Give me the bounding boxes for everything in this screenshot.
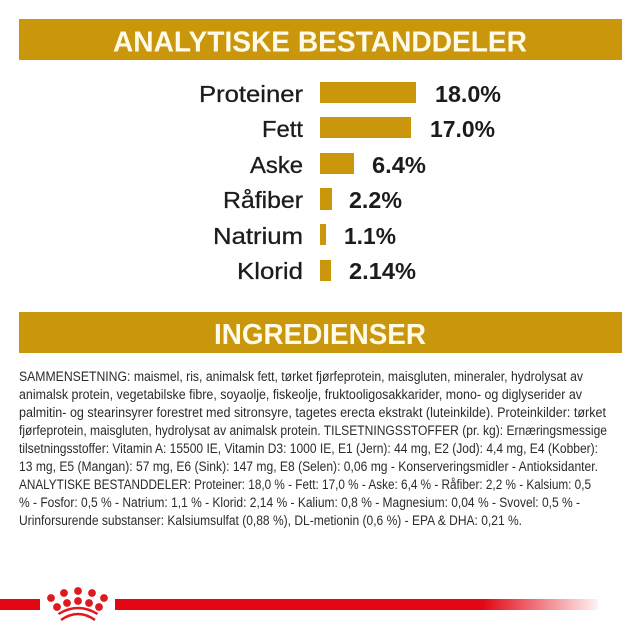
text block: ingredients: [19, 369, 607, 528]
row: Råfiber: Råfiber: [223, 187, 303, 213]
heading: ingredienser: INGREDIENSER: [214, 319, 426, 351]
row: Aske: [250, 152, 426, 178]
bar chart: analytical constituents: [199, 81, 501, 284]
text block: ingredients: animalsk protein, vegetabilske fibre, soyaolje, fiskeolje, fruktooligosakkarider, mono- og diglyserider av: [19, 387, 582, 402]
row: Råfiber: 2.2%: [349, 187, 402, 213]
footer: red brand line: [0, 599, 598, 610]
row: Fett: Fett: [262, 116, 304, 142]
heading: analytiske bestanddeler: [19, 19, 622, 60]
row: Proteiner: Proteiner: [199, 81, 303, 107]
row: Aske: 6.4%: [372, 152, 426, 178]
text block: ingredients: Urinforsurende substanser: Kalsiumsulfat (0,88 %), DL-metionin (0,6 %) - EPA & DHA: 0,21 %.: [19, 513, 522, 528]
heading: ingredienser: [19, 312, 622, 353]
icon: royal canin crown: [47, 587, 108, 620]
row: Fett: 17.0%: [430, 116, 495, 142]
row: Proteiner: 18.0%: [435, 81, 501, 107]
row: Klorid: Klorid: [237, 258, 303, 284]
row: Natrium: [213, 223, 396, 249]
row: Klorid: [237, 258, 416, 284]
row: Fett: [262, 116, 495, 142]
heading: analytiske bestanddeler: ANALYTISKE BESTANDDELER: [113, 26, 527, 58]
row: Natrium: 1.1%: [344, 223, 396, 249]
row: Aske: Aske: [250, 152, 303, 178]
row: Råfiber: [223, 187, 402, 213]
text block: ingredients: palmitin- og stearinsyrer forestret med sitronsyre, tagetes erecta ekstrakt (luteinkilde). Proteinkilder: tørket: [19, 405, 606, 420]
row: Klorid: 2.14%: [349, 258, 416, 284]
row: Proteiner: [199, 81, 501, 107]
row: Natrium: Natrium: [213, 223, 303, 249]
text block: ingredients: % - Fosfor: 0,5 % - Natrium: 1,1 % - Klorid: 2,14 % - Kalium: 0,8 % - Magnesium: 0,04 % - Svovel: 0,5 % -: [19, 495, 580, 510]
text block: ingredients: SAMMENSETNING: maismel, ris, animalsk fett, tørket fjørfeprotein, maisgluten, mineraler, hydrolysat av: [19, 369, 583, 384]
